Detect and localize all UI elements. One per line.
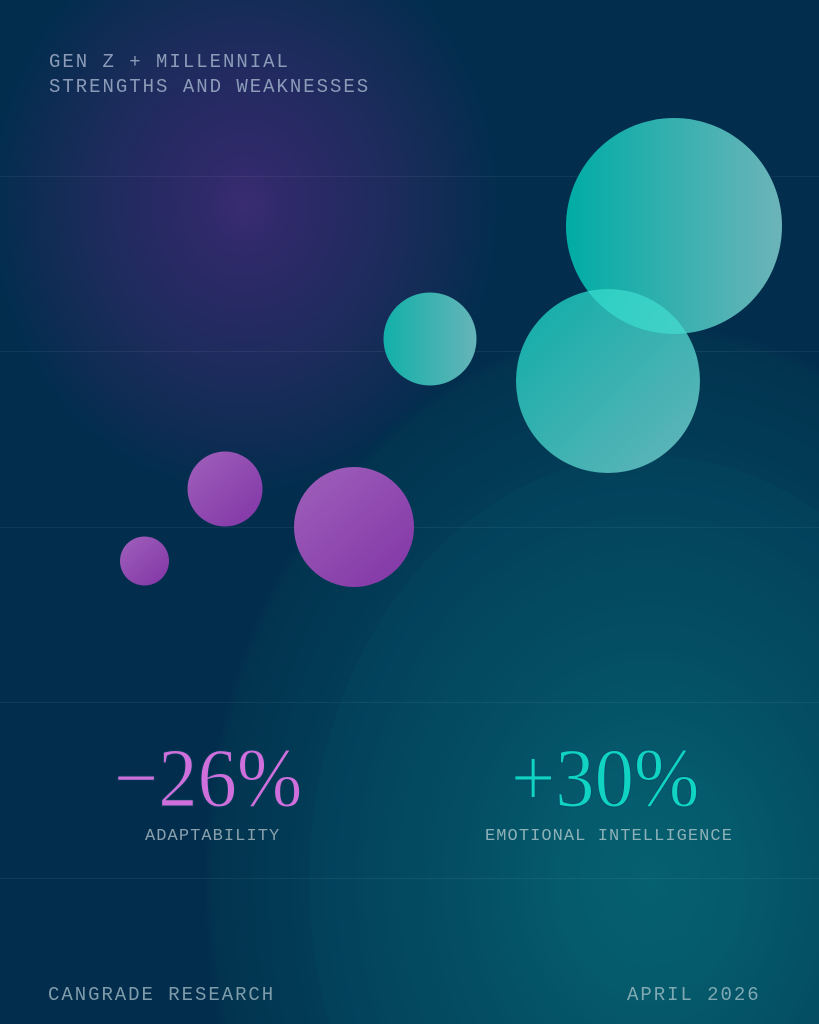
bubble: small teal bbox=[384, 292, 476, 386]
stat: emotional intelligence bbox=[485, 732, 733, 846]
title bbox=[49, 51, 370, 98]
stat label: ADAPTABILITY bbox=[145, 827, 280, 846]
stat value: +30% bbox=[511, 732, 699, 825]
bubble chart bbox=[120, 118, 782, 587]
bubble: medium purple bbox=[188, 452, 262, 526]
title: STRENGTHS AND WEAKNESSES bbox=[49, 76, 370, 98]
bubble: medium teal with overlap bbox=[516, 289, 700, 473]
bubble: large teal bbox=[566, 118, 782, 334]
footer: source: CANGRADE RESEARCH bbox=[48, 984, 275, 1006]
footer: date: APRIL 2026 bbox=[627, 984, 761, 1006]
stat label: EMOTIONAL INTELLIGENCE bbox=[485, 827, 733, 846]
stat: adaptability bbox=[114, 732, 302, 846]
stat value: −26% bbox=[114, 732, 302, 825]
bubble: small purple bbox=[120, 536, 169, 586]
title: GEN Z + MILLENNIAL bbox=[49, 51, 290, 73]
bubble: large purple bbox=[294, 467, 414, 587]
